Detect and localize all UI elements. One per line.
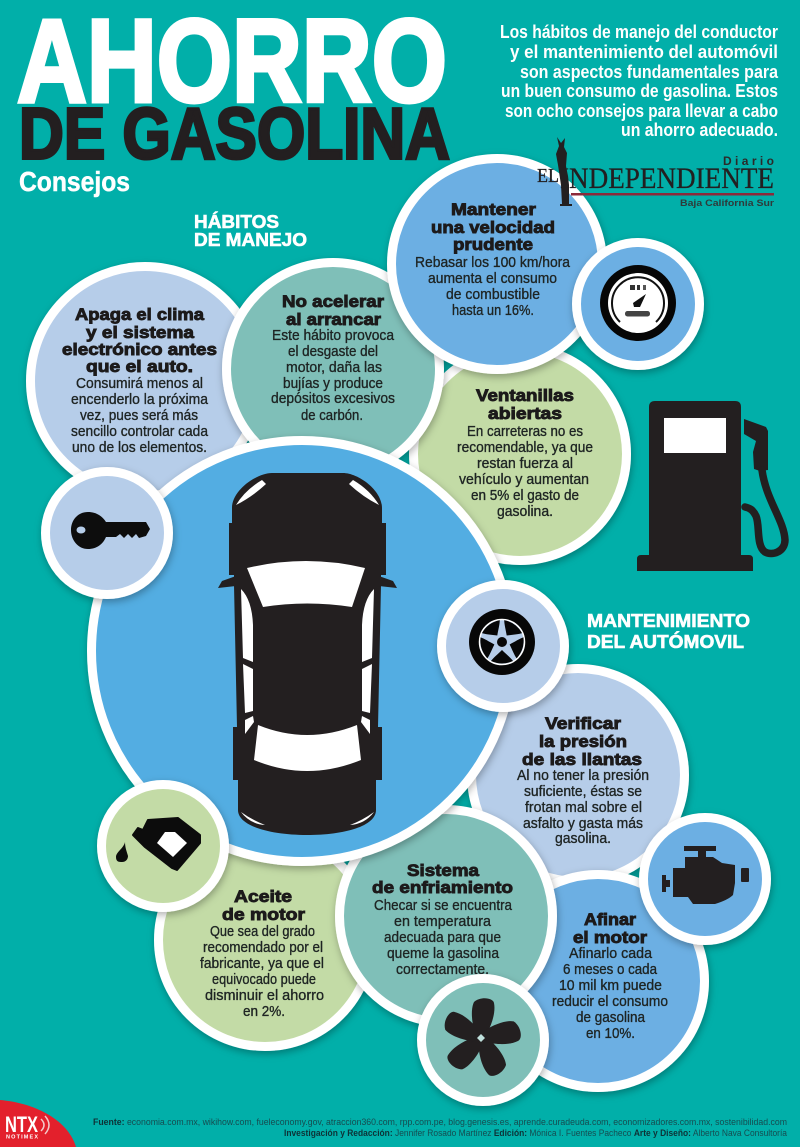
side windows <box>241 589 374 734</box>
panel: ventanillas abiertas <box>414 348 626 560</box>
text: ventanillas: restan fuerza al <box>477 455 573 472</box>
icon: wheel <box>442 584 564 708</box>
text: verificar: asfalto y gasta más <box>523 815 643 832</box>
body <box>229 473 386 835</box>
panel: no acelerar <box>226 262 440 476</box>
text: afinar: 10 mil km puede <box>559 977 662 994</box>
text: ventanillas <box>457 423 593 520</box>
logo: ntx notimex <box>0 1100 76 1147</box>
logo: el independiente <box>537 137 774 209</box>
heading: hábitos de manejo <box>194 211 307 250</box>
heading: mantenimiento del automóvil <box>587 611 750 652</box>
heading: sistema <box>372 861 513 897</box>
intro text: y el mantenimiento del automóvil <box>510 41 778 62</box>
logo: el independiente: INDEPENDIENTE <box>560 162 774 195</box>
logo: el independiente: Diario <box>723 154 774 168</box>
text: sistema: Checar si se encuentra <box>374 897 513 914</box>
logo: ntx notimex: NTX <box>5 1112 38 1137</box>
heading: aceite: de motor <box>222 905 305 924</box>
heading: sistema: de enfriamiento <box>372 878 513 897</box>
text: verificar: frotan mal sobre el <box>525 799 642 816</box>
heading: ventanillas: abiertas <box>488 404 562 423</box>
text: no acelerar: de carbón. <box>301 407 363 424</box>
panel: mantener una velocidad prudente <box>392 158 602 370</box>
headlights and taillights <box>236 480 379 825</box>
text: verificar: suficiente, éstas se <box>524 783 642 800</box>
heading: verificar <box>522 714 642 769</box>
text: mantener: Rebasar los 100 km/hora <box>415 254 571 271</box>
text: ventanillas: En carreteras no es <box>467 423 583 440</box>
heading: mantener: una velocidad <box>431 218 555 237</box>
text: ventanillas: en 5% el gasto de <box>471 487 579 504</box>
heading: afinar: el motor <box>573 928 647 947</box>
heading: sistema: Sistema <box>407 861 480 880</box>
text: mantener: hasta un 16%. <box>452 302 534 319</box>
text: sistema: queme la gasolina <box>387 945 500 962</box>
credits: Investigación y Redacción: Jennifer Rosado Martínez Edición: Mónica I. Fuentes Pacheco Arte y Diseño: Alberto Nava Consultoría <box>284 1128 787 1138</box>
text: apaga el clima: sencillo controlar cada <box>71 423 209 440</box>
heading: mantener <box>431 200 555 254</box>
text: aceite: en 2%. <box>243 1003 285 1020</box>
text: no acelerar: motor, daña las <box>286 359 382 376</box>
credits <box>93 1117 787 1138</box>
icon: engine <box>644 818 766 940</box>
heading: aceite <box>222 887 305 924</box>
logo: el independiente: Baja California Sur <box>680 198 774 209</box>
text: verificar: gasolina. <box>555 830 611 847</box>
text: apaga el clima <box>71 375 209 456</box>
heading: mantenimiento del automóvil: MANTENIMIENTO <box>587 611 750 631</box>
text: ventanillas: recomendable, ya que <box>457 439 593 456</box>
heading: hábitos de manejo: DE MANEJO <box>194 230 307 250</box>
icon: oil can <box>102 784 224 908</box>
heading: mantenimiento del automóvil: DEL AUTÓMOVIL <box>587 631 744 652</box>
text: afinar <box>552 945 668 1042</box>
text: afinar: 6 meses o cada <box>563 961 658 978</box>
heading: ventanillas: Ventanillas <box>476 386 574 405</box>
panel: car circle <box>92 440 512 862</box>
text: apaga el clima: Consumirá menos al <box>76 375 203 392</box>
text: aceite: disminuir el ahorro <box>205 987 324 1004</box>
text: apaga el clima: encenderlo la próxima <box>71 391 209 408</box>
text: mantener: de combustible <box>446 286 540 303</box>
text: ventanillas: gasolina. <box>497 503 553 520</box>
heading: no acelerar <box>282 292 384 329</box>
logo: ntx notimex: NOTIMEX <box>6 1134 38 1140</box>
text: afinar: Afinarlo cada <box>569 945 653 962</box>
heading: apaga el clima: Apaga el clima <box>75 305 205 324</box>
icon: speedometer <box>576 242 700 366</box>
credits: Fuente: economia.com.mx, wikihow.com, fueleconomy.gov, atraccion360.com, rpp.com.pe, blog.genesis.es, aprende.curadeuda.com, economizadores.com.mx, sostenibilidad.com <box>93 1117 787 1127</box>
text: ventanillas: vehículo y aumentan <box>459 471 589 488</box>
heading: ventanillas <box>476 386 574 423</box>
panel: sistema de enfriamiento <box>340 810 552 1022</box>
heading: aceite: Aceite <box>234 887 292 906</box>
icon: gas pump <box>637 401 785 571</box>
heading: apaga el clima: que el auto. <box>86 357 193 376</box>
heading: mantener: Mantener <box>451 200 536 219</box>
panel: aceite de motor <box>158 834 372 1046</box>
intro text <box>500 21 779 140</box>
heading: afinar: Afinar <box>584 910 636 929</box>
title: DE GASOLINA <box>19 94 450 174</box>
text: no acelerar: Este hábito provoca <box>272 327 395 344</box>
icon: key <box>46 472 168 594</box>
rear window <box>254 725 361 771</box>
text: afinar: reducir el consumo <box>552 993 668 1010</box>
intro text: un ahorro adecuado. <box>621 119 778 140</box>
text: afinar: de gasolina <box>576 1009 646 1026</box>
text: afinar: en 10%. <box>586 1025 635 1042</box>
panel: apaga el clima <box>30 266 260 496</box>
text: no acelerar: el desgaste del <box>288 343 378 360</box>
text: sistema <box>374 897 513 978</box>
text: sistema: en temperatura <box>394 913 492 930</box>
heading: verificar: de las llantas <box>522 750 642 769</box>
text: aceite <box>200 923 324 1020</box>
text: verificar: Al no tener la presión <box>517 767 649 784</box>
subtitle: Consejos <box>19 166 130 197</box>
icon: car <box>218 473 397 835</box>
heading: apaga el clima: y el sistema <box>86 323 195 342</box>
text: no acelerar <box>271 327 395 424</box>
panel: afinar el motor <box>492 874 704 1088</box>
text: mantener <box>415 254 571 319</box>
heading: verificar: Verificar <box>545 714 621 733</box>
text: verificar <box>517 767 649 847</box>
text: apaga el clima: vez, pues será más <box>80 407 198 424</box>
heading: apaga el clima <box>62 305 217 376</box>
text: aceite: equivocado puede <box>212 971 316 988</box>
text: sistema: correctamente. <box>396 961 489 978</box>
logo: el independiente: EL <box>537 165 559 187</box>
panel: verificar la presión de las llantas <box>472 668 684 882</box>
heading: hábitos de manejo: HÁBITOS <box>194 211 279 232</box>
text: no acelerar: bujías y produce <box>283 375 383 392</box>
title <box>17 0 450 174</box>
text: aceite: recomendado por el <box>203 939 323 956</box>
heading: no acelerar: No acelerar <box>282 292 384 311</box>
mirrors <box>218 576 397 588</box>
heading: afinar <box>573 910 647 947</box>
text: aceite: fabricante, ya que el <box>200 955 324 972</box>
text: no acelerar: depósitos excesivos <box>271 390 395 407</box>
windshield <box>247 561 365 607</box>
icon: fan <box>422 978 544 1102</box>
text: aceite: Que sea del grado <box>210 923 315 940</box>
heading: verificar: la presión <box>539 732 627 751</box>
text: sistema: adecuada para que <box>384 929 501 946</box>
heading: apaga el clima: electrónico antes <box>62 340 217 359</box>
text: mantener: aumenta el consumo <box>428 270 557 287</box>
heading: mantener: prudente <box>453 235 533 254</box>
heading: no acelerar: al arrancar <box>286 310 381 329</box>
text: apaga el clima: uno de los elementos. <box>72 439 207 456</box>
